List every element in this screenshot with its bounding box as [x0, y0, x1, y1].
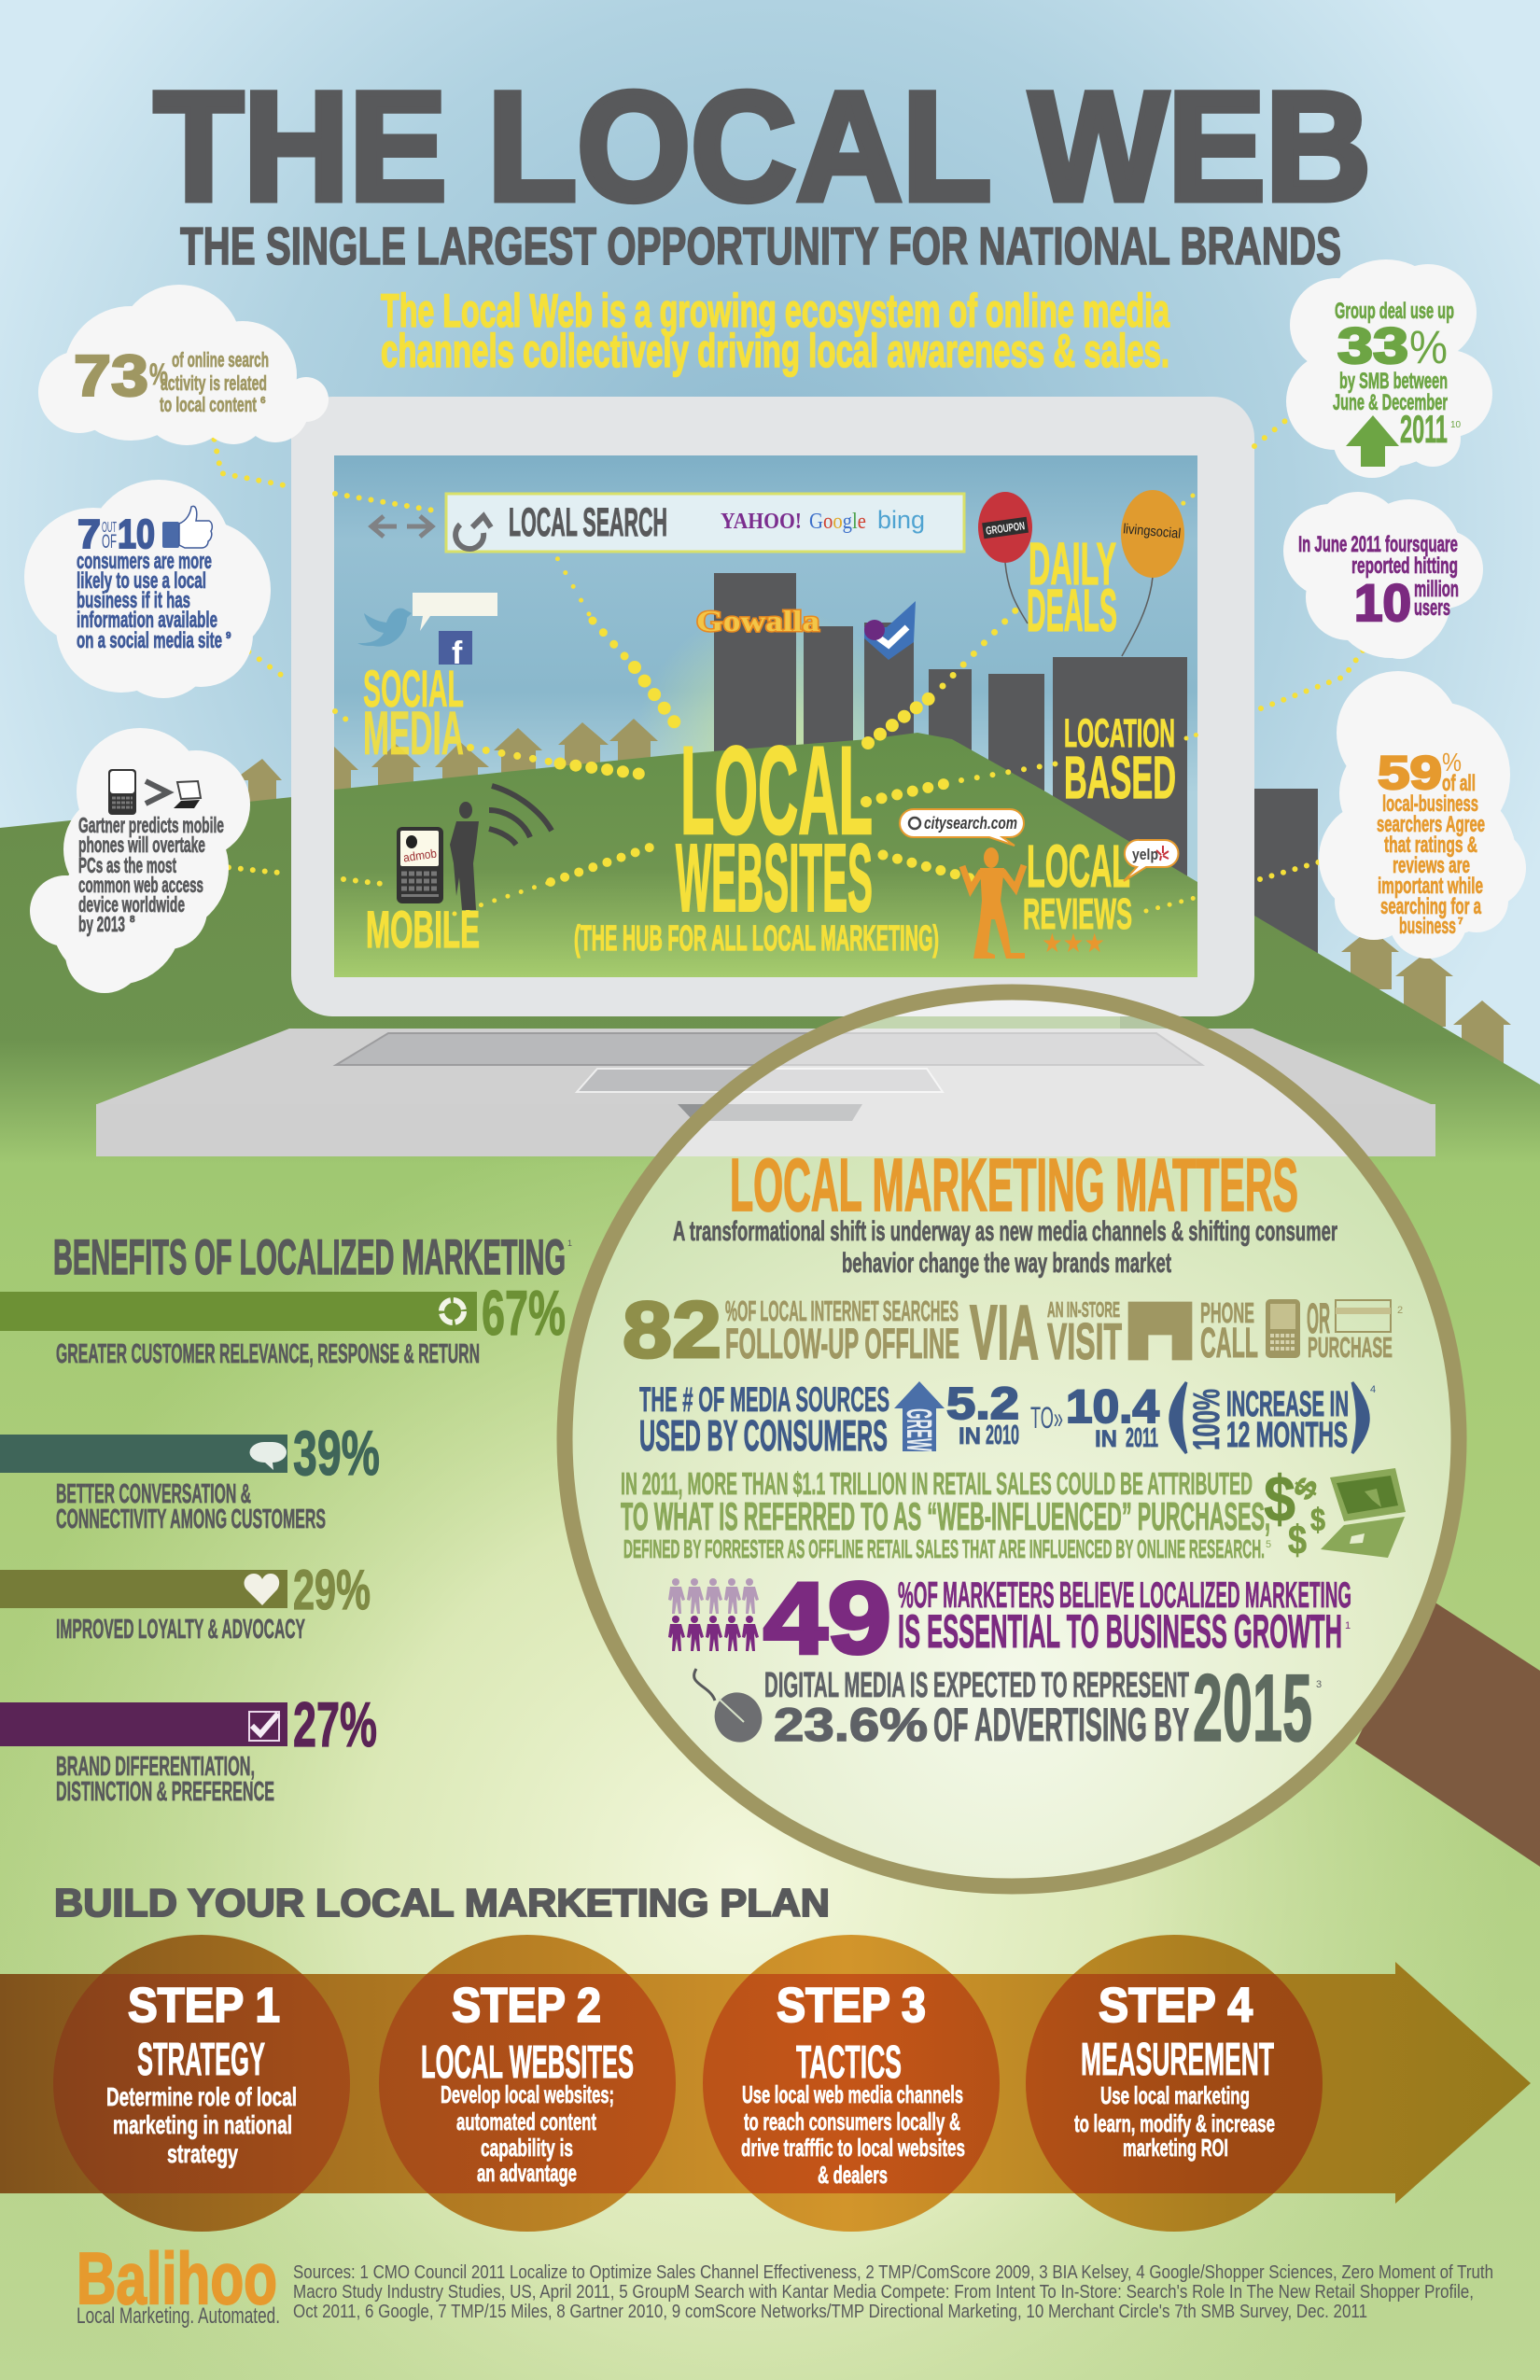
stat row: media sources: IN	[959, 1423, 981, 1449]
step 1: Determine role of local	[106, 2082, 297, 2111]
stat row: 49 percent	[668, 1561, 1351, 1675]
consumers description: likely to use a local	[77, 568, 206, 594]
laptop trackpad	[577, 1069, 943, 1092]
gartner description: 8	[130, 915, 135, 925]
screen hill	[334, 733, 1197, 977]
icon: thumbs up	[162, 506, 212, 548]
icon: phone greater than laptop	[108, 769, 201, 815]
location based label: LOCATION	[1064, 711, 1175, 756]
stat row: digital media: 2015	[1193, 1655, 1312, 1761]
stat row: digital media: OF ADVERTISING BY	[933, 1699, 1189, 1751]
step 3: STEP 3	[777, 1979, 926, 2033]
cloud: 7 out of 10	[24, 480, 271, 698]
admob label: admob	[402, 847, 438, 864]
local websites hub label	[574, 721, 939, 959]
stat row: 82 percent: AN IN-STORE	[1047, 1297, 1120, 1322]
icon: phone	[1266, 1299, 1300, 1358]
stat row: media sources	[639, 1379, 1376, 1460]
hills and green ground	[0, 797, 1540, 2380]
magnifying glass lens	[557, 985, 1467, 1903]
browser arrows	[371, 516, 432, 537]
icon: admob phone	[397, 827, 443, 903]
icon: speech bubble	[250, 1442, 287, 1470]
step 2: STEP 2	[452, 1979, 601, 2033]
laptop screen contents	[334, 455, 1197, 977]
step 1: STRATEGY	[137, 2035, 265, 2085]
cloud: gartner mobile	[30, 728, 250, 993]
consumers description: information available	[77, 608, 217, 633]
stat row: web influenced	[621, 1463, 1406, 1563]
27 label: BRAND DIFFERENTIATION,	[56, 1752, 255, 1782]
balloons	[978, 490, 1184, 656]
consumers description: 9	[226, 631, 231, 641]
7 of 10 stat: 7	[77, 511, 101, 557]
59 percent text: of all	[1442, 771, 1476, 796]
icon: orange person	[962, 847, 1025, 959]
groupon balloon	[978, 492, 1032, 563]
lens intro	[673, 1216, 1337, 1279]
7 of 10 stat: OF	[102, 531, 117, 553]
signal arcs	[489, 786, 552, 845]
sources: Oct 2011, 6 Google, 7 TMP/15 Miles, 8 Gartner 2010, 9 comScore Networks/TMP Directional Marketing, 10 Merchant Circle's 7th SMB Survey, Dec. 2011	[293, 2302, 1367, 2322]
livingsocial balloon	[1121, 490, 1184, 578]
location based label	[1064, 711, 1176, 811]
cloud shape	[1319, 671, 1526, 959]
groupon label	[982, 517, 1029, 539]
step 4: marketing ROI	[1123, 2134, 1228, 2162]
step 2: Develop local websites;	[441, 2080, 614, 2108]
gartner description: device worldwide	[78, 892, 185, 917]
step 4: Use local marketing	[1100, 2081, 1250, 2109]
location based label: BASED	[1064, 744, 1176, 811]
step 1: strategy	[167, 2139, 238, 2168]
ground glow	[0, 1111, 1540, 2380]
group deal text: by SMB between	[1339, 369, 1448, 394]
stat row: digital media	[694, 1655, 1322, 1761]
59 percent text: 59	[1378, 747, 1442, 799]
stat row: media sources: TO»	[1030, 1401, 1063, 1435]
27 value: 27%	[293, 1689, 377, 1760]
39 label: CONNECTIVITY AMONG CUSTOMERS	[56, 1505, 326, 1534]
step 1: STEP 1	[128, 1979, 280, 2033]
local reviews label	[1023, 833, 1132, 959]
gartner description: by 2013	[78, 912, 125, 936]
73 stat: 73	[74, 344, 148, 409]
cloud: group deal	[1286, 259, 1492, 478]
step 3	[741, 1979, 965, 2189]
balihoo logo: Balihoo	[77, 2237, 277, 2319]
local websites hub label: (THE HUB FOR ALL LOCAL MARKETING)	[574, 919, 939, 959]
step 1	[106, 1979, 297, 2168]
icon: dollar signs: $	[1288, 1518, 1307, 1563]
59 percent text: that ratings &	[1384, 833, 1477, 858]
stat row: 82 percent: OR	[1307, 1295, 1330, 1342]
step 2	[421, 1979, 634, 2187]
cloud shape	[1283, 492, 1483, 659]
daily deals label	[1027, 530, 1117, 644]
group deal text: 10	[1450, 420, 1462, 430]
73 description	[160, 348, 269, 416]
cloud shape	[38, 285, 329, 445]
step 4: to learn, modify & increase	[1074, 2109, 1275, 2137]
balihoo logo: Local Marketing. Automated.	[77, 2303, 280, 2329]
59 percent text: reviews are	[1393, 853, 1470, 878]
step circle backs	[53, 1935, 1323, 2232]
daily deals label: DAILY	[1029, 530, 1116, 597]
bar: 27 percent	[0, 1689, 377, 1807]
step 2: capability is	[481, 2134, 573, 2162]
title: THE LOCAL WEB	[154, 61, 1371, 233]
step 3: TACTICS	[796, 2037, 902, 2088]
59 percent text	[1377, 747, 1485, 939]
27 label	[56, 1752, 274, 1807]
7 of 10 stat	[77, 511, 155, 557]
cloud shape	[30, 728, 250, 993]
laptop notch	[678, 1104, 862, 1121]
27 label: DISTINCTION & PREFERENCE	[56, 1777, 274, 1807]
29 label: IMPROVED LOYALTY & ADVOCACY	[56, 1615, 305, 1645]
7 of 10 stat: 10	[118, 511, 155, 557]
icon: facebook	[439, 631, 472, 671]
icon: facebook: f	[452, 636, 463, 671]
lens ring	[565, 992, 1459, 1886]
stat row: web influenced: 5	[1266, 1539, 1271, 1550]
foursquare text	[1298, 532, 1459, 632]
group deal text: 33	[1337, 318, 1408, 374]
social media group	[357, 593, 497, 767]
rating stars: ★★★	[1042, 928, 1105, 959]
group deal text	[1333, 299, 1462, 451]
laptop keyboard	[336, 1033, 1202, 1065]
group deal text: %	[1409, 321, 1448, 373]
gartner description: Gartner predicts mobile	[78, 813, 224, 837]
yahoo logo: YAHOO!	[721, 510, 802, 534]
text: DEALS	[1027, 577, 1117, 644]
step 2: automated content	[456, 2107, 596, 2135]
gartner description: phones will overtake	[78, 833, 205, 857]
39 label	[56, 1479, 326, 1534]
panel: local marketing matters	[621, 1143, 1406, 1761]
panel: benefits of localized marketing	[0, 1230, 572, 1807]
citysearch bubble	[900, 809, 1024, 846]
59 percent text: business	[1399, 914, 1456, 939]
search bar: LOCAL SEARCH	[509, 500, 667, 545]
livingsocial label: livingsocial	[1123, 521, 1182, 542]
percent: %	[149, 357, 168, 391]
speech bubble	[413, 593, 497, 631]
right building behind the hill	[1254, 789, 1318, 966]
cloud: 59 percent	[1319, 671, 1526, 959]
stat row: 82 percent: 2	[1397, 1305, 1403, 1316]
stat row: 49 percent: 49	[763, 1561, 891, 1675]
arrow shape	[0, 1962, 1531, 2204]
icon: dollar signs	[1264, 1463, 1325, 1563]
consumers description	[77, 549, 231, 653]
gowalla logo: Gowalla	[696, 604, 819, 637]
lens gap tint	[840, 1016, 1120, 1029]
stat row: 82 percent: 82	[623, 1286, 721, 1375]
73 description: to local content	[160, 393, 257, 416]
panel: local marketing matters: GREW	[899, 1408, 938, 1451]
stat row: media sources: IN	[1095, 1426, 1117, 1452]
benefits heading: BENEFITS OF LOCALIZED MARKETING	[53, 1230, 566, 1285]
bing logo: bing	[877, 506, 925, 534]
icon: dollar signs: $	[1264, 1463, 1295, 1535]
screen sky	[334, 455, 1197, 882]
stat row: 49 percent: 1	[1345, 1620, 1351, 1631]
stat row: 82 percent: PHONE	[1200, 1296, 1254, 1329]
lens lower fill	[557, 1156, 1467, 1903]
dotted connectors	[212, 395, 1375, 914]
cloud shape	[24, 480, 271, 698]
step circle overlaps	[53, 1974, 1323, 2193]
media label: MEDIA	[363, 698, 464, 767]
67 label: GREATER CUSTOMER RELEVANCE, RESPONSE & RETURN	[56, 1339, 480, 1369]
stat row: 82 percent: FOLLOW-UP OFFLINE	[725, 1320, 959, 1367]
icon: checkbox	[249, 1712, 279, 1741]
bar: 29 percent	[0, 1559, 371, 1645]
sky background	[0, 0, 1540, 1213]
lens upper overlay over laptop	[676, 1001, 1348, 1156]
local websites hub label: LOCAL	[680, 721, 873, 861]
icon: dollar signs: $	[1310, 1503, 1325, 1538]
gartner description	[78, 813, 224, 936]
bar: 67 percent	[0, 1278, 566, 1369]
stat row: 82 percent: PURCHASE	[1308, 1331, 1393, 1364]
step 3: to reach consumers locally &	[744, 2107, 960, 2135]
yelp bubble	[1124, 840, 1178, 881]
stat row: 82 percent: VISIT	[1047, 1312, 1122, 1370]
step 4: MEASUREMENT	[1081, 2035, 1274, 2085]
laptop	[96, 397, 1435, 1156]
icon: foursquare check	[864, 601, 916, 660]
build plan heading: BUILD YOUR LOCAL MARKETING PLAN	[54, 1881, 830, 1925]
icon: computer mouse	[694, 1669, 770, 1750]
59 percent text: local-business	[1382, 791, 1478, 817]
29 value: 29%	[293, 1559, 371, 1621]
phone keys	[401, 874, 439, 889]
google logo: Google	[809, 510, 866, 534]
foursquare text: reported hitting	[1351, 553, 1458, 579]
stat row: digital media: 3	[1316, 1679, 1322, 1690]
59 percent text: important while	[1378, 874, 1483, 899]
lens intro: behavior change the way brands market	[842, 1248, 1171, 1279]
stat row: digital media: 23.6%	[774, 1699, 928, 1751]
stat row: media sources: 10.4	[1066, 1380, 1159, 1433]
step 1: marketing in national	[113, 2110, 292, 2139]
skyline buildings	[714, 573, 1187, 875]
tagline	[381, 285, 1170, 377]
houses on the hillsides	[233, 759, 1511, 1083]
group deal text: June & December	[1333, 390, 1448, 415]
mobile label: MOBILE	[366, 900, 480, 959]
icon: up arrow	[1346, 415, 1399, 467]
citysearch bubble: citysearch.com	[924, 814, 1017, 833]
icon: store	[1128, 1302, 1192, 1360]
left bracket	[1170, 1382, 1186, 1453]
icon: recycle ring	[441, 1300, 464, 1323]
cloud: 73% local search	[38, 285, 329, 445]
laptop screen bezel	[291, 397, 1254, 1016]
apple logo	[406, 835, 417, 848]
sources	[293, 2262, 1493, 2322]
foursquare text: 10	[1354, 573, 1411, 632]
icon: grew arrow	[894, 1381, 945, 1451]
gartner description: PCs as the most	[78, 853, 176, 877]
stat row: media sources: USED BY CONSUMERS	[639, 1411, 888, 1460]
cloud: foursquare	[1283, 492, 1483, 659]
foursquare text: users	[1414, 595, 1450, 621]
laptop front edge	[96, 1104, 1435, 1156]
59 percent text: searching for a	[1380, 894, 1481, 919]
icon: green laptop	[1321, 1468, 1406, 1558]
stat row: media sources: 12 MONTHS	[1226, 1416, 1348, 1455]
59 percent text: %	[1442, 748, 1462, 777]
step 3: drive trafffic to local websites	[741, 2134, 965, 2162]
7 of 10 stat: OUT	[102, 520, 117, 536]
foursquare text: million	[1414, 577, 1459, 602]
social label: SOCIAL	[363, 659, 464, 718]
cloud shape	[1286, 259, 1492, 478]
stat row: digital media: DIGITAL MEDIA IS EXPECTED TO REPRESENT	[764, 1666, 1189, 1705]
consumers description: consumers are more	[77, 549, 212, 574]
icon: twitter bird	[357, 609, 412, 647]
stat row: media sources: 2011	[1126, 1423, 1158, 1453]
step 3: & dealers	[818, 2161, 888, 2189]
stat row: media sources: THE # OF MEDIA SOURCES	[639, 1380, 889, 1419]
icon: person with signal	[450, 786, 552, 910]
screen glow	[656, 633, 864, 756]
stat row: 82 percent	[623, 1286, 1403, 1376]
local reviews label: LOCAL	[1027, 833, 1130, 900]
39 value: 39%	[293, 1418, 380, 1489]
59 percent text: 7	[1458, 917, 1463, 927]
39 label: BETTER CONVERSATION &	[56, 1479, 251, 1509]
local reviews label: REVIEWS	[1023, 889, 1132, 938]
icon: people grid	[668, 1578, 759, 1651]
step 2: LOCAL WEBSITES	[421, 2037, 634, 2088]
local websites hub label: WEBSITES	[676, 824, 873, 931]
groupon label: GROUPON	[985, 519, 1026, 538]
stat row: 82 percent: %OF LOCAL INTERNET SEARCHES	[725, 1295, 959, 1327]
step 3: Use local web media channels	[742, 2080, 963, 2108]
group deal text: Group deal use up	[1335, 299, 1454, 324]
consumers description: business if it has	[77, 588, 190, 613]
yelp bubble: yelp	[1132, 846, 1158, 863]
step 4	[1074, 1979, 1275, 2162]
stat row: media sources: 100%	[1186, 1389, 1227, 1450]
steps arrow	[0, 1935, 1531, 2232]
stat row: media sources: 2010	[986, 1421, 1019, 1450]
stat row: 82 percent: VIA	[970, 1289, 1039, 1376]
icon: credit card	[1336, 1300, 1391, 1332]
screen houses	[334, 719, 658, 790]
73 description: 6	[260, 396, 266, 406]
73 description: of online search	[172, 348, 269, 371]
footnote: 1	[567, 1239, 572, 1248]
step 2: an advantage	[477, 2159, 577, 2187]
67 value: 67%	[482, 1278, 566, 1349]
search bar	[371, 494, 964, 552]
group deal text: 2011	[1400, 407, 1448, 451]
consumers description: on a social media site	[77, 628, 222, 653]
step 4: STEP 4	[1099, 1979, 1253, 2033]
magnifier handle	[1355, 1598, 1540, 1867]
right bracket	[1352, 1382, 1368, 1453]
73 description: activity is related	[161, 371, 267, 395]
stat row: media sources: 5.2	[946, 1379, 1019, 1429]
refresh icon	[455, 516, 491, 549]
stat row: media sources: 4	[1370, 1384, 1376, 1395]
laptop base top	[97, 1029, 1431, 1104]
balloon strings	[1005, 563, 1153, 656]
gartner description: common web access	[78, 873, 203, 897]
bar: 39 percent	[0, 1418, 380, 1534]
stat row: 82 percent: CALL	[1200, 1319, 1258, 1366]
stat row: media sources: INCREASE IN	[1226, 1385, 1349, 1424]
icon: heart	[245, 1574, 279, 1605]
icon: dollar signs: $	[1288, 1472, 1324, 1505]
